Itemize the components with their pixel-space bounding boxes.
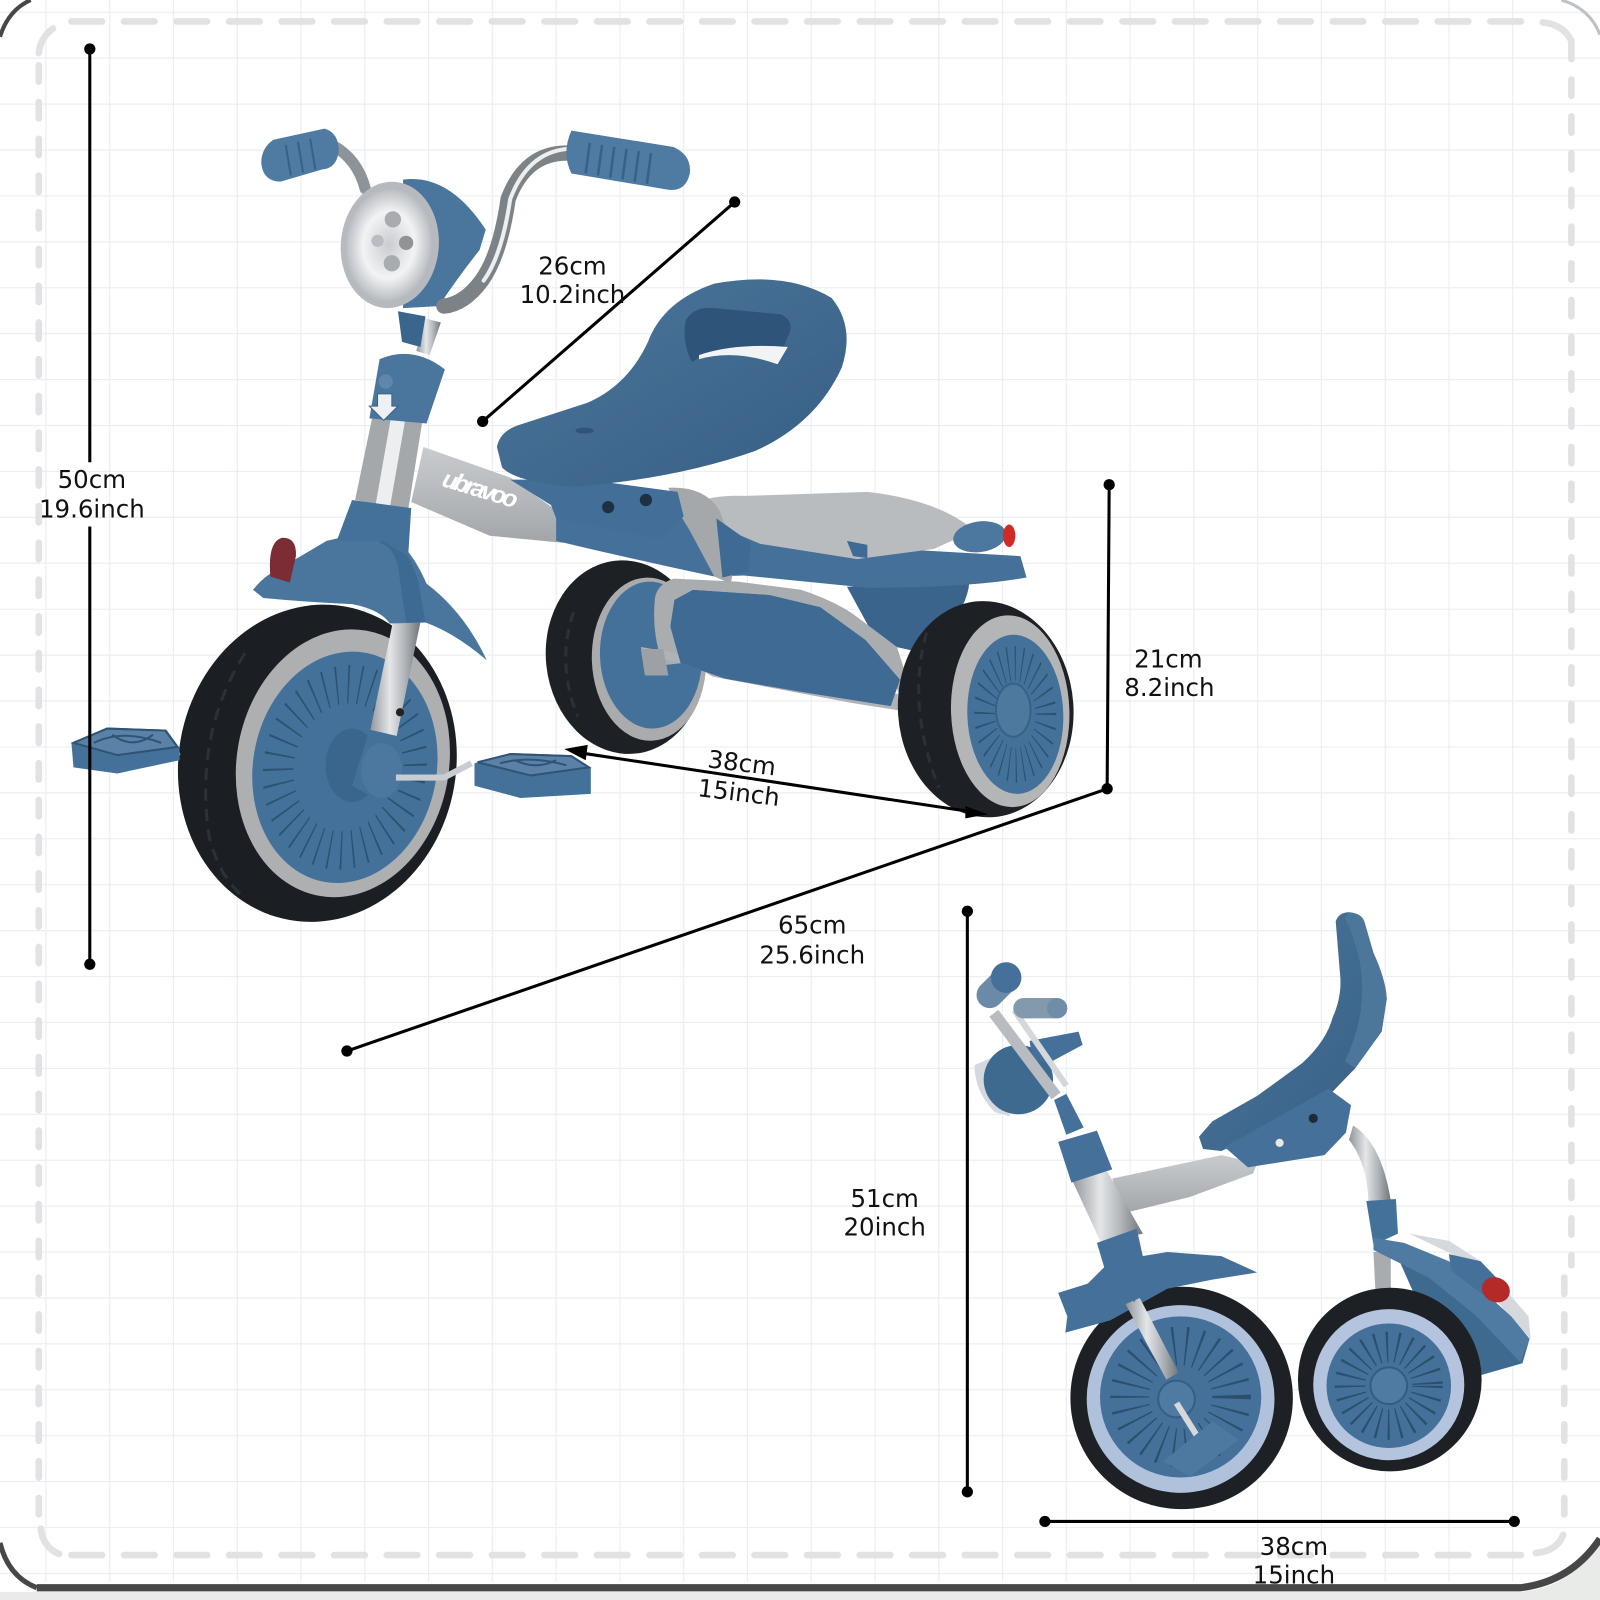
dimension: overall height 50cm (39, 43, 145, 970)
dimension: length 65cm: 25.6inch (759, 940, 865, 969)
dimension: overall height 50cm: 50cm (58, 465, 126, 494)
folded tricycle side view (974, 912, 1531, 1509)
dimension: folded width 38cm: 38cm (1260, 1532, 1328, 1561)
seat bracket (1224, 1089, 1351, 1167)
dimension: length 65cm: 65cm (778, 911, 846, 940)
dimension: folded height 51cm: 51cm (850, 1184, 919, 1213)
rear right wheel (891, 595, 1081, 823)
dimension: handlebar 26cm: 26cm (538, 251, 607, 280)
storage tray and lid (556, 488, 1027, 588)
head tube (355, 354, 445, 510)
head tube (1054, 1094, 1143, 1243)
rear left wheel (536, 552, 715, 762)
rear wheel (1298, 1288, 1482, 1471)
seat bracket (510, 480, 684, 539)
front wheel (1070, 1287, 1293, 1509)
handlebar (332, 145, 566, 306)
bucket under tray (847, 582, 969, 653)
frame tube (1112, 1155, 1257, 1213)
dimension: width 38cm arrow (564, 744, 988, 818)
dimension: height 21cm: 21cm (1134, 644, 1203, 673)
headlight (335, 178, 444, 312)
dimension: folded width 38cm: 15inch (1253, 1561, 1335, 1590)
dimension: folded width 38cm (1039, 1516, 1520, 1590)
folded handlebar and lamp (974, 962, 1083, 1116)
front fork (369, 617, 420, 740)
headlight housing (403, 179, 486, 308)
dimension: height 21cm (1102, 479, 1214, 794)
dimension: handlebar 26cm: 10.2inch (520, 280, 625, 309)
dimension: folded height 51cm (843, 906, 973, 1497)
dimension: height 21cm: 8.2inch (1124, 673, 1214, 702)
stem (398, 311, 441, 355)
dimension: overall height 50cm: 19.6inch (39, 494, 145, 523)
front wheel (153, 582, 482, 944)
front hub (326, 729, 406, 802)
front mudguard (253, 500, 487, 660)
pedal crank (396, 763, 471, 778)
main tricycle (71, 129, 1081, 944)
rear arch frame (641, 579, 908, 710)
seat (497, 279, 847, 487)
dimension: width 38cm arrow: 38cm (706, 744, 778, 782)
left pedal (71, 728, 180, 773)
dimension: handlebar 26cm (477, 196, 740, 427)
mudguard (1058, 1252, 1257, 1333)
folded seat (1199, 912, 1387, 1151)
fork collar (1097, 1229, 1146, 1302)
rear tray and tail lamp (1373, 1234, 1531, 1362)
dimension: folded height 51cm: 20inch (843, 1213, 926, 1242)
rear bucket (1396, 1253, 1530, 1376)
right pedal (474, 753, 591, 798)
dimension: length 65cm (341, 789, 1107, 1057)
logo: ubravoo (439, 466, 521, 514)
front hub and pedal (1158, 1381, 1239, 1477)
handlebar grips (261, 129, 690, 190)
main frame (411, 447, 563, 543)
rear post (1349, 1126, 1398, 1293)
fork (1126, 1298, 1179, 1380)
dimension: width 38cm arrow: 15inch (696, 773, 781, 812)
